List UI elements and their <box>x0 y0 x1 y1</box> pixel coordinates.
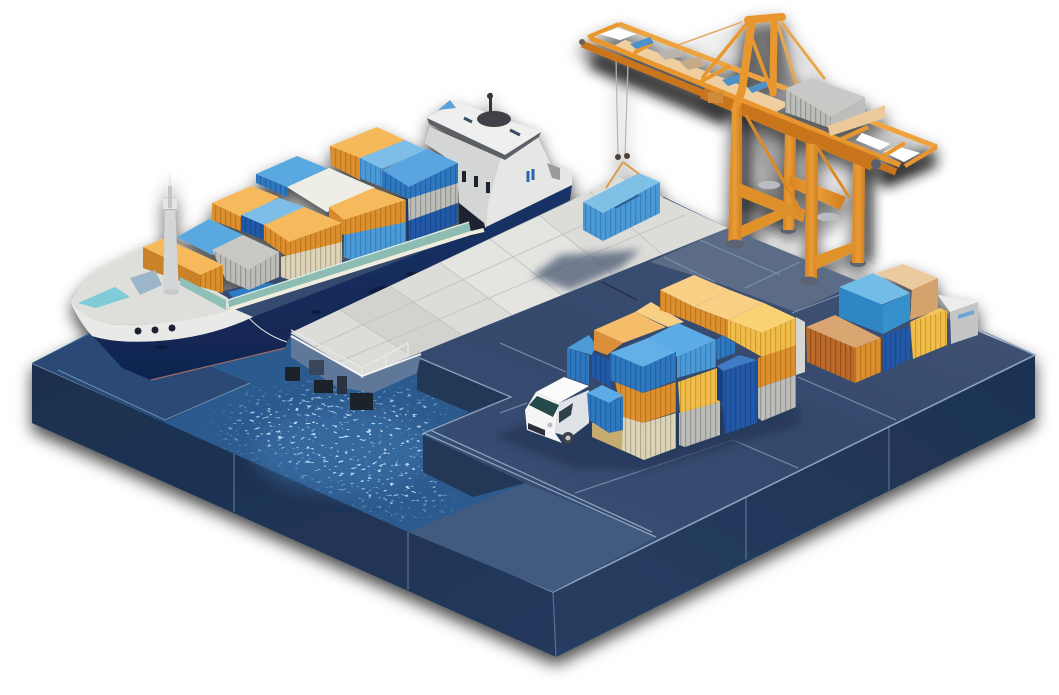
A-frame tower <box>678 17 824 110</box>
trolley items <box>630 37 654 49</box>
portholes <box>134 324 176 334</box>
blue rear containers <box>567 335 612 388</box>
truck and container ground shadow <box>495 405 800 470</box>
delivery truck <box>525 377 589 444</box>
container blue far left <box>177 219 243 255</box>
container orange back <box>330 127 405 180</box>
blue upper container <box>839 273 910 334</box>
rear legs and lower bracing <box>783 133 865 263</box>
white container <box>938 295 978 344</box>
railing <box>291 330 408 378</box>
yellow container <box>910 308 948 359</box>
cream front base <box>592 413 676 460</box>
concrete quay <box>285 178 728 410</box>
blue centre containers <box>648 323 735 378</box>
raised quay wall and notch <box>408 357 656 592</box>
bow hatch <box>78 287 130 308</box>
container orange front <box>264 207 342 283</box>
upper concrete plate near crane <box>650 228 860 312</box>
front legs and bracing <box>726 107 856 286</box>
ship bow deck <box>71 248 230 325</box>
container blue rear-left <box>256 156 329 197</box>
base right side face <box>553 355 1035 657</box>
cargo ship <box>71 93 572 380</box>
yellow and gray column <box>678 367 720 447</box>
small blue container by truck <box>587 385 623 433</box>
crane soft shadow on background <box>592 30 934 262</box>
main container stack <box>567 275 805 460</box>
water basin <box>32 325 525 532</box>
radar <box>477 111 511 127</box>
bridge roof <box>427 102 541 155</box>
tan container <box>876 264 938 320</box>
base left side face <box>32 363 556 657</box>
container light blue left <box>241 198 304 240</box>
quay cast shadow <box>532 250 640 290</box>
container gray <box>212 235 279 290</box>
right container stack <box>806 264 978 383</box>
white container behind <box>796 317 805 375</box>
orange rear containers <box>594 302 684 355</box>
orange top row <box>660 275 730 323</box>
dark blue small container <box>883 326 911 372</box>
superstructure <box>425 93 572 237</box>
mast <box>163 171 179 295</box>
crane cables and spreader <box>606 58 639 188</box>
large blue front container <box>610 338 676 393</box>
deck equipment <box>130 270 162 295</box>
roof fin <box>438 100 456 110</box>
ship containers <box>143 127 458 293</box>
ship hull <box>92 185 572 380</box>
mooring rope <box>249 318 287 342</box>
dock plate seams <box>500 240 896 493</box>
container white <box>287 168 375 212</box>
low blue deck containers <box>228 283 295 302</box>
hull marks <box>156 247 483 349</box>
machine house <box>785 78 885 136</box>
foot pads <box>780 226 866 267</box>
hanging container <box>583 173 660 241</box>
under plates <box>758 181 780 189</box>
container orange bow <box>143 238 223 293</box>
pier face and fenders <box>291 333 421 393</box>
dock base <box>32 197 1035 657</box>
orange front tower <box>728 303 796 421</box>
dark blue door column <box>717 355 757 434</box>
glass railing <box>180 222 484 310</box>
boom <box>579 24 937 172</box>
orange front lower <box>615 382 676 423</box>
rust container <box>806 315 881 383</box>
container blue stack <box>375 149 458 242</box>
water ripples <box>207 380 458 524</box>
gantry crane <box>579 17 937 286</box>
container orange left <box>212 186 279 231</box>
ship bow side <box>71 302 253 342</box>
container light blue <box>360 140 427 187</box>
container orange mid <box>329 188 406 262</box>
